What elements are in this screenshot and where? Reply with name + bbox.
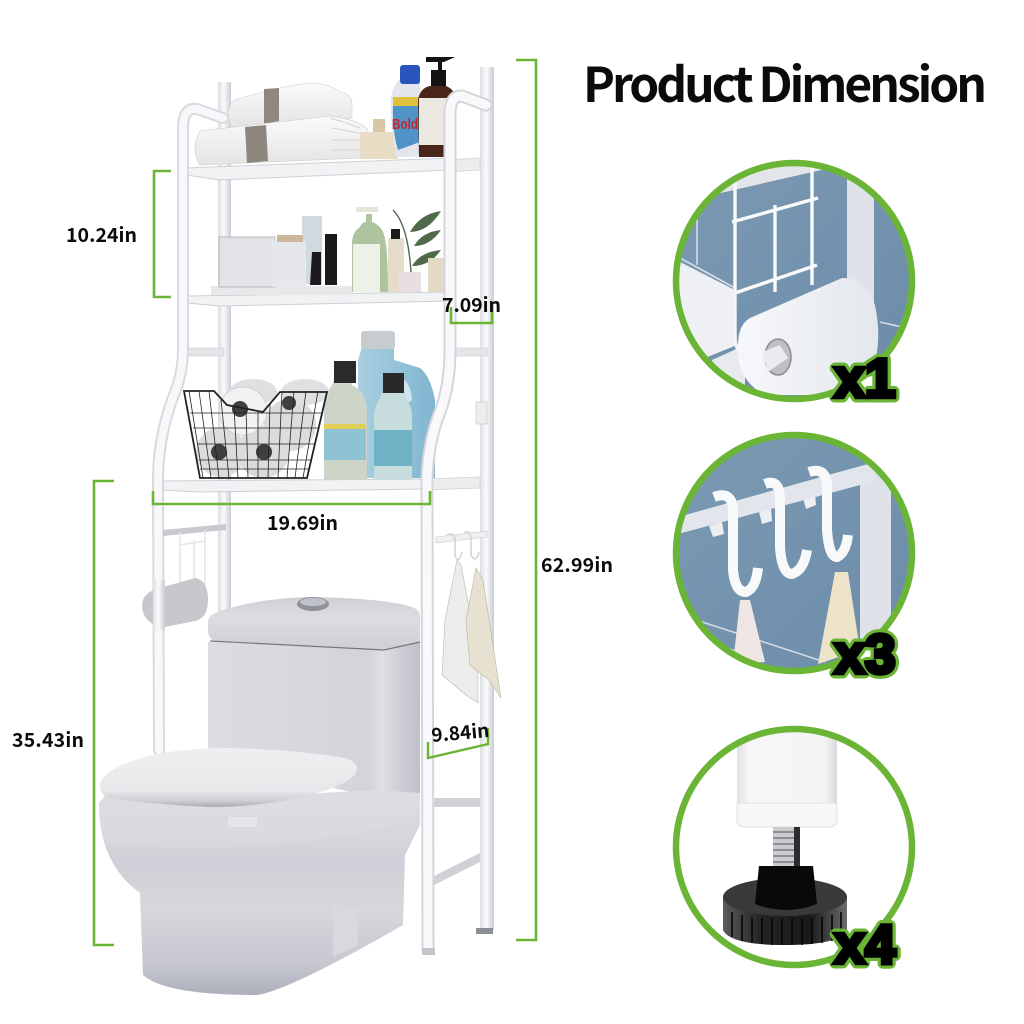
small dark bottles bbox=[310, 234, 337, 285]
lower towel band bbox=[245, 125, 268, 163]
hooks bbox=[447, 532, 479, 560]
quantity x4: x4 bbox=[834, 913, 896, 975]
tank corner bbox=[675, 262, 737, 358]
horizontal rail bbox=[678, 462, 875, 534]
cream box cap bbox=[373, 119, 385, 132]
rail clips bbox=[709, 494, 816, 537]
bottle left label strip bbox=[324, 424, 366, 429]
quantity x1: x1 bbox=[834, 347, 896, 409]
detergent yellow strip bbox=[393, 97, 420, 106]
wire grid bbox=[732, 165, 818, 293]
dimension: 19.69in: 19.69in bbox=[267, 507, 338, 536]
paper roll bbox=[142, 578, 208, 628]
top bar bbox=[720, 166, 822, 194]
knob ridges bbox=[732, 912, 841, 945]
lower shelf bbox=[161, 479, 425, 492]
circle ring bbox=[676, 163, 912, 399]
holder wire bbox=[734, 290, 738, 352]
green bottle pump bbox=[356, 207, 378, 212]
cream box bbox=[360, 132, 398, 159]
quantity x4: x4 bbox=[834, 913, 896, 975]
towel rail with hooks bbox=[436, 531, 501, 703]
pump head bbox=[426, 57, 455, 86]
dimension: 10.24in: 10.24in bbox=[66, 219, 137, 248]
detergent bottle bbox=[391, 80, 423, 157]
tile wall bbox=[679, 438, 909, 668]
detergent label bbox=[393, 106, 420, 150]
side post bbox=[860, 468, 891, 648]
green bottle label bbox=[353, 244, 380, 292]
knob collar bbox=[755, 866, 817, 910]
collar bbox=[737, 803, 837, 827]
bottle right label bbox=[374, 430, 412, 466]
screw threads bbox=[773, 831, 794, 863]
title: Product Dimension bbox=[583, 46, 987, 116]
upper towel band bbox=[264, 88, 279, 124]
detergent brand: Bold bbox=[392, 116, 418, 133]
toilet bbox=[99, 597, 420, 995]
left upper rung bbox=[188, 348, 224, 356]
tile wall bbox=[680, 170, 909, 396]
dimension: 62.99in: 62.99in bbox=[541, 549, 613, 578]
left frame highlight bbox=[158, 109, 223, 750]
tube bbox=[737, 732, 837, 802]
tile lines bbox=[681, 218, 900, 328]
paper roll bbox=[738, 278, 878, 395]
side post bbox=[847, 179, 874, 302]
lower shelf items bbox=[184, 331, 435, 480]
seat lid bbox=[100, 748, 357, 807]
bottle left label bbox=[324, 424, 366, 460]
dimension: 9.84in: 9.84in bbox=[430, 716, 490, 748]
dimension: 10.24in bracket bbox=[154, 171, 171, 297]
circle ring bbox=[676, 435, 912, 671]
towel right bbox=[818, 572, 860, 664]
bottle left cap bbox=[334, 361, 356, 383]
tank lid bbox=[208, 597, 420, 649]
left post segment bbox=[153, 580, 165, 630]
jug cap bbox=[361, 331, 395, 349]
plant bbox=[393, 210, 441, 272]
wire basket bbox=[184, 391, 327, 478]
circle ring bbox=[676, 729, 912, 965]
toilet corner bbox=[730, 648, 734, 651]
dimension: 35.43in: 35.43in bbox=[12, 724, 84, 753]
green bottle bbox=[352, 214, 388, 292]
panel: paper holder detail bbox=[670, 158, 920, 409]
tank bbox=[208, 642, 420, 800]
tissue box bbox=[219, 237, 275, 287]
brown bottle label bbox=[419, 98, 455, 145]
blue jug bbox=[358, 347, 435, 478]
bottle right bbox=[374, 392, 412, 480]
dimension: 9.84in bracket bbox=[428, 728, 488, 758]
lower towel folds bbox=[330, 118, 362, 150]
screw bbox=[773, 827, 794, 866]
rear rolls bbox=[229, 379, 329, 405]
right frame pipe bbox=[427, 96, 486, 948]
circle photo bbox=[680, 166, 909, 396]
panel: hooks detail bbox=[670, 430, 920, 685]
toilet corner lower bbox=[712, 349, 745, 385]
lower towel bbox=[195, 116, 368, 165]
holder bar bbox=[163, 524, 226, 536]
hook left bbox=[714, 495, 758, 592]
towel left bbox=[733, 600, 765, 664]
background bbox=[670, 725, 920, 970]
top shelf side rail bbox=[445, 158, 480, 172]
brown bottle body bbox=[418, 86, 455, 157]
detergent cap bbox=[400, 65, 420, 84]
rail bbox=[436, 531, 487, 543]
top shelf items bbox=[195, 57, 455, 165]
lower rung bbox=[434, 798, 480, 807]
circle photo bbox=[723, 732, 847, 945]
dimension: 7.09in bracket bbox=[451, 307, 492, 323]
rim highlight bbox=[99, 790, 420, 848]
quantity x1: x1 bbox=[834, 347, 896, 409]
hook right bbox=[809, 471, 848, 557]
rim reflection bbox=[228, 817, 257, 827]
roll pin bbox=[762, 345, 788, 372]
middle shelf bbox=[186, 292, 450, 306]
quantity x3: x3 bbox=[834, 623, 896, 685]
lower shelf side rail bbox=[425, 477, 480, 490]
jar right bbox=[428, 258, 444, 292]
tile lines bbox=[701, 620, 826, 663]
upper towel bbox=[228, 83, 352, 127]
hook middle bbox=[765, 483, 807, 574]
black cap bbox=[391, 229, 400, 239]
right upper rung bbox=[456, 348, 488, 356]
lower rolls bbox=[196, 399, 316, 478]
top shelf bbox=[186, 158, 450, 180]
bracket clip bbox=[476, 402, 487, 424]
plant pot bbox=[399, 272, 421, 292]
jar lid bbox=[277, 235, 303, 242]
wire grid bbox=[180, 530, 205, 590]
screw shadow bbox=[794, 827, 800, 866]
front roll bbox=[219, 387, 267, 435]
towel right bbox=[466, 568, 501, 698]
rack front frame bbox=[158, 96, 486, 948]
rear right post foot bbox=[476, 928, 493, 934]
bottle right cap bbox=[383, 373, 404, 393]
jar bbox=[272, 241, 306, 287]
dimension: 7.09in: 7.09in bbox=[442, 289, 501, 318]
service panel bbox=[333, 905, 358, 957]
rack foot bbox=[422, 948, 435, 955]
tray bbox=[211, 286, 352, 295]
bowl bbox=[99, 790, 420, 995]
bottle left bbox=[324, 378, 367, 480]
circle photo bbox=[679, 438, 909, 668]
middle shelf items bbox=[211, 207, 444, 295]
towel left bbox=[442, 560, 478, 703]
roll holes bbox=[211, 396, 296, 460]
shelving rack bbox=[161, 67, 494, 934]
flush button bbox=[297, 597, 329, 611]
quantity x3: x3 bbox=[834, 623, 896, 685]
diagonal rung bbox=[434, 853, 480, 885]
dimension: 19.69in bracket bbox=[153, 491, 430, 504]
cosmetic tube bbox=[302, 216, 322, 284]
roll core bbox=[765, 339, 791, 375]
rear left post bbox=[218, 82, 231, 612]
panel: adjustable foot detail bbox=[670, 725, 920, 975]
right frame highlight bbox=[427, 96, 486, 948]
jug handle bbox=[396, 378, 412, 408]
dimension: 35.43in bracket bbox=[94, 481, 114, 945]
knob body bbox=[723, 897, 847, 945]
rear right post bbox=[480, 67, 494, 930]
left frame pipe bbox=[158, 109, 223, 750]
small bottle bbox=[388, 238, 404, 292]
left toilet roll holder bbox=[142, 524, 226, 630]
dimension: 62.99in bracket bbox=[516, 60, 536, 940]
lid seam bbox=[210, 641, 420, 650]
knob top bbox=[723, 878, 847, 916]
